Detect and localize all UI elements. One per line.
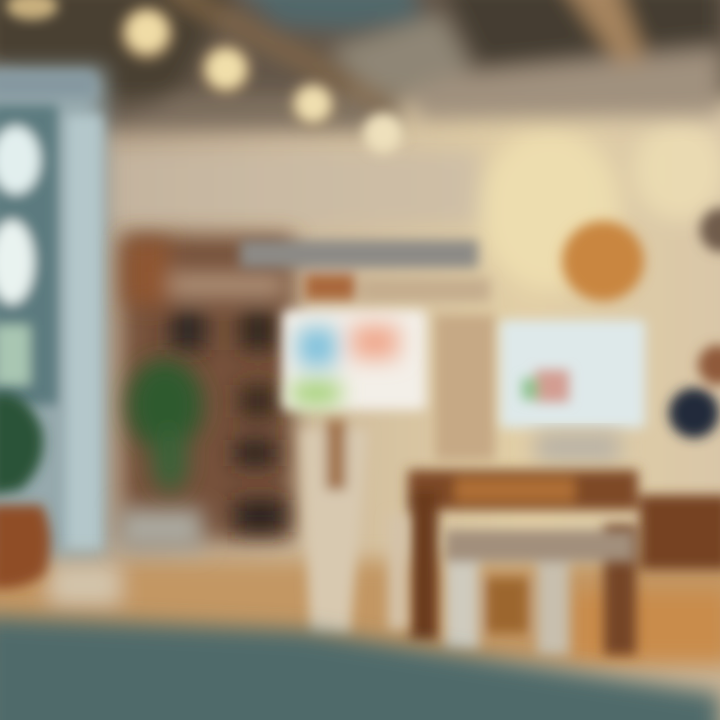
light 2: [200, 43, 252, 95]
light 5: [6, 0, 58, 20]
desk: [388, 470, 720, 655]
monitor base: [535, 432, 620, 462]
right monitor: [500, 320, 645, 462]
chair: [388, 515, 635, 655]
light 1: [119, 5, 175, 61]
plant pot: [0, 505, 51, 589]
shelf on wall: [240, 240, 495, 460]
foreground surface: [0, 616, 720, 720]
bookshelf: [118, 235, 294, 550]
round wall clock: [562, 221, 644, 301]
wall: [0, 90, 720, 610]
monitor chart: [522, 370, 569, 402]
floor: [0, 560, 720, 665]
left monitor stand: [302, 420, 368, 635]
potted plant on left: [0, 393, 51, 589]
indoor plant: [127, 359, 203, 492]
light 4: [363, 113, 403, 153]
wall decor right: [669, 208, 720, 438]
ceiling: [0, 0, 720, 130]
monitor screen content: [292, 325, 398, 404]
light 3: [290, 81, 336, 127]
window: [0, 68, 105, 568]
ceiling lights: [6, 0, 403, 153]
left monitor: [282, 310, 426, 410]
